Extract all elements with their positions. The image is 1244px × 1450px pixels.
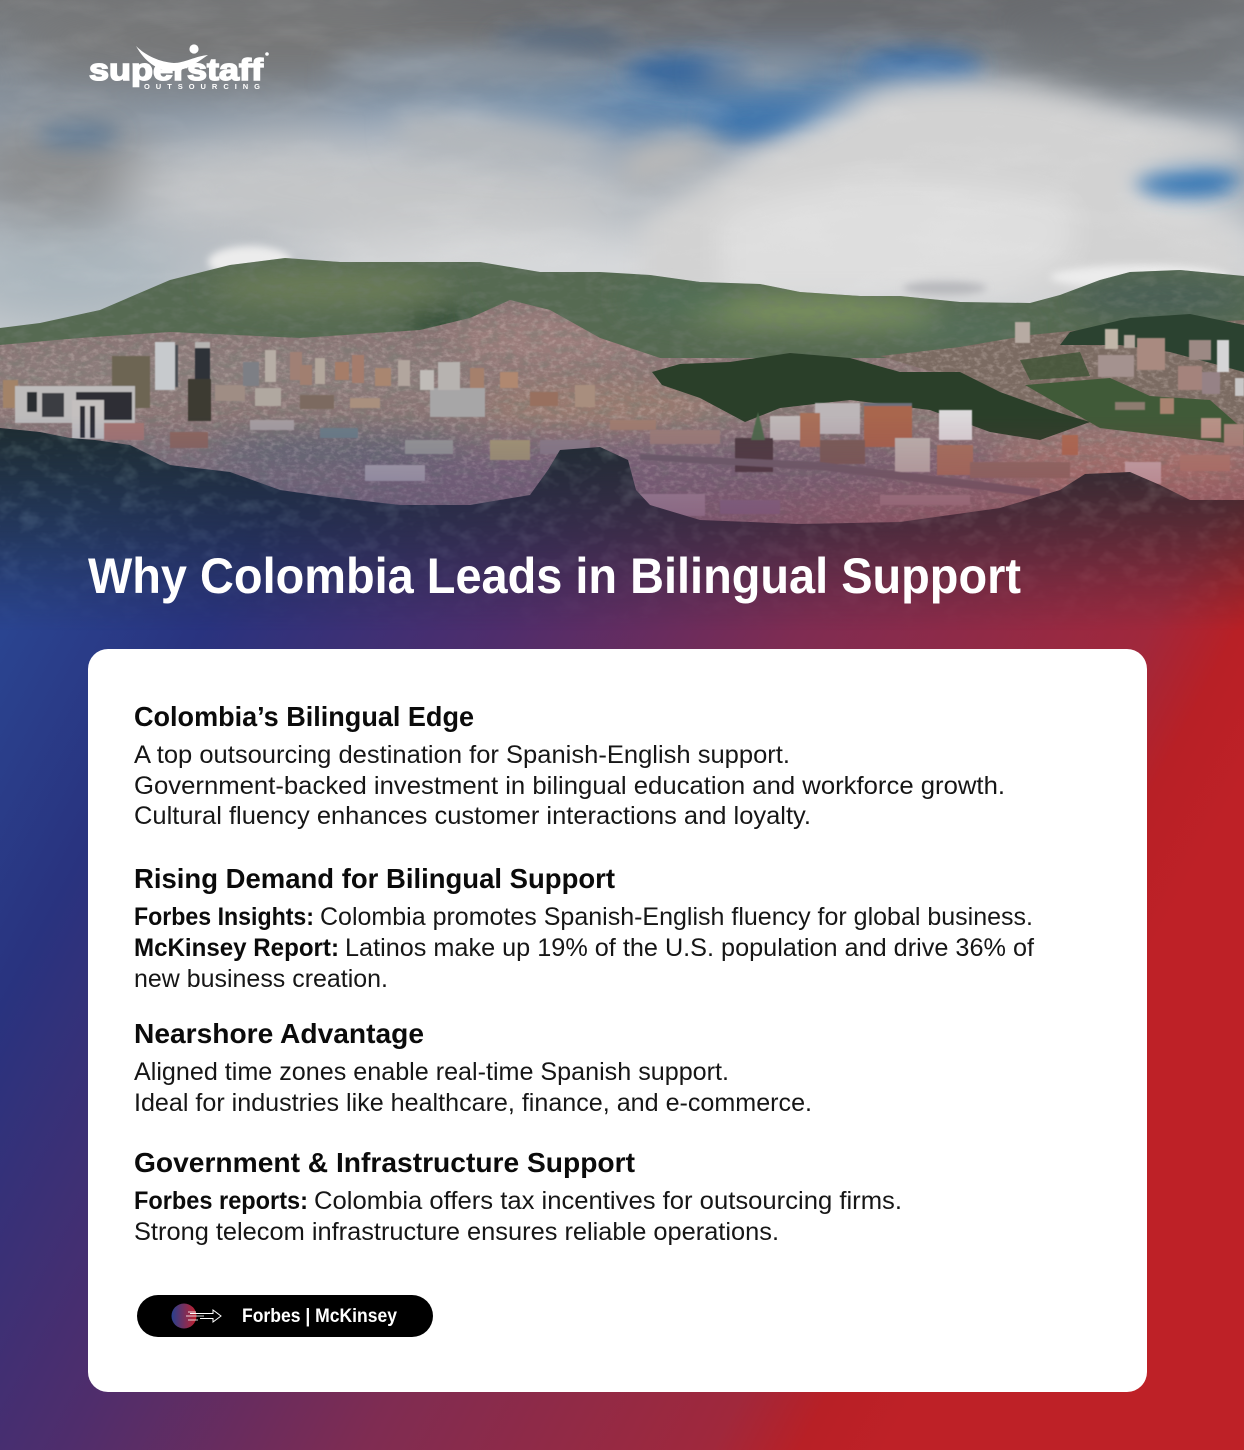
body text: McKinsey Report: (134, 934, 339, 962)
downtown towers, left (3, 342, 656, 481)
source text: Forbes | McKinsey (242, 1306, 397, 1327)
body text: Latinos make up 19% of the U.S. population and drive 36% of (345, 934, 1034, 962)
body text (134, 1058, 812, 1117)
body text: Forbes Insights: (134, 903, 314, 931)
body text: A top outsourcing destination for Spanish-English support. (134, 741, 790, 769)
body text: Aligned time zones enable real-time Spanish support. (134, 1058, 729, 1086)
sky with clouds (0, 0, 1244, 328)
white cloud masses (335, 51, 1244, 300)
body text: Ideal for industries like healthcare, finance, and e-commerce. (134, 1089, 812, 1117)
logo: superstaff outsourcing (89, 44, 269, 91)
panel: white content card (88, 649, 1147, 1392)
photo: Medellín skyline and mountains (0, 0, 1244, 650)
body text (134, 741, 1005, 830)
mountains (0, 258, 1244, 358)
blue sky gaps (36, 28, 1239, 198)
body text: Cultural fluency enhances customer interactions and loyalty. (134, 802, 811, 830)
registered mark (265, 52, 269, 56)
body text: new business creation. (134, 965, 388, 993)
section: Rising Demand for Bilingual Support (134, 863, 1034, 993)
body text: Colombia promotes Spanish-English fluency for global business. (320, 903, 1033, 931)
logo wordmark: superstaff (89, 52, 264, 87)
source pill (137, 1295, 433, 1337)
title: Why Colombia Leads in Bilingual Support (88, 548, 1021, 604)
city (0, 300, 1244, 524)
heading: Government & Infrastructure Support (134, 1147, 635, 1178)
right hillside with apartment towers (880, 310, 1244, 450)
logo swoosh (136, 46, 208, 71)
body text: Forbes reports: (134, 1187, 308, 1215)
body text: Strong telecom infrastructure ensures reliable operations. (134, 1218, 779, 1246)
body text (134, 903, 1034, 993)
body text: Government-backed investment in bilingual education and workforce growth. (134, 772, 1005, 800)
body text (134, 1187, 902, 1246)
body text: Colombia offers tax incentives for outsourcing firms. (314, 1187, 902, 1215)
logo tagline: OUTSOURCING (144, 82, 260, 91)
foreground trees (0, 428, 1244, 620)
dark green forested hill (652, 353, 1090, 440)
heading: Colombia’s Bilingual Edge (134, 701, 474, 732)
section: Government & Infrastructure Support (134, 1147, 902, 1246)
heading: Nearshore Advantage (134, 1018, 424, 1049)
midtown towers and cathedral, right (640, 403, 1230, 516)
section: Colombia's Bilingual Edge (134, 701, 1005, 830)
icon: gradient circle with arrow (172, 1304, 221, 1328)
heading: Rising Demand for Bilingual Support (134, 863, 615, 894)
logo dot (189, 44, 199, 54)
section: Nearshore Advantage (134, 1018, 812, 1117)
